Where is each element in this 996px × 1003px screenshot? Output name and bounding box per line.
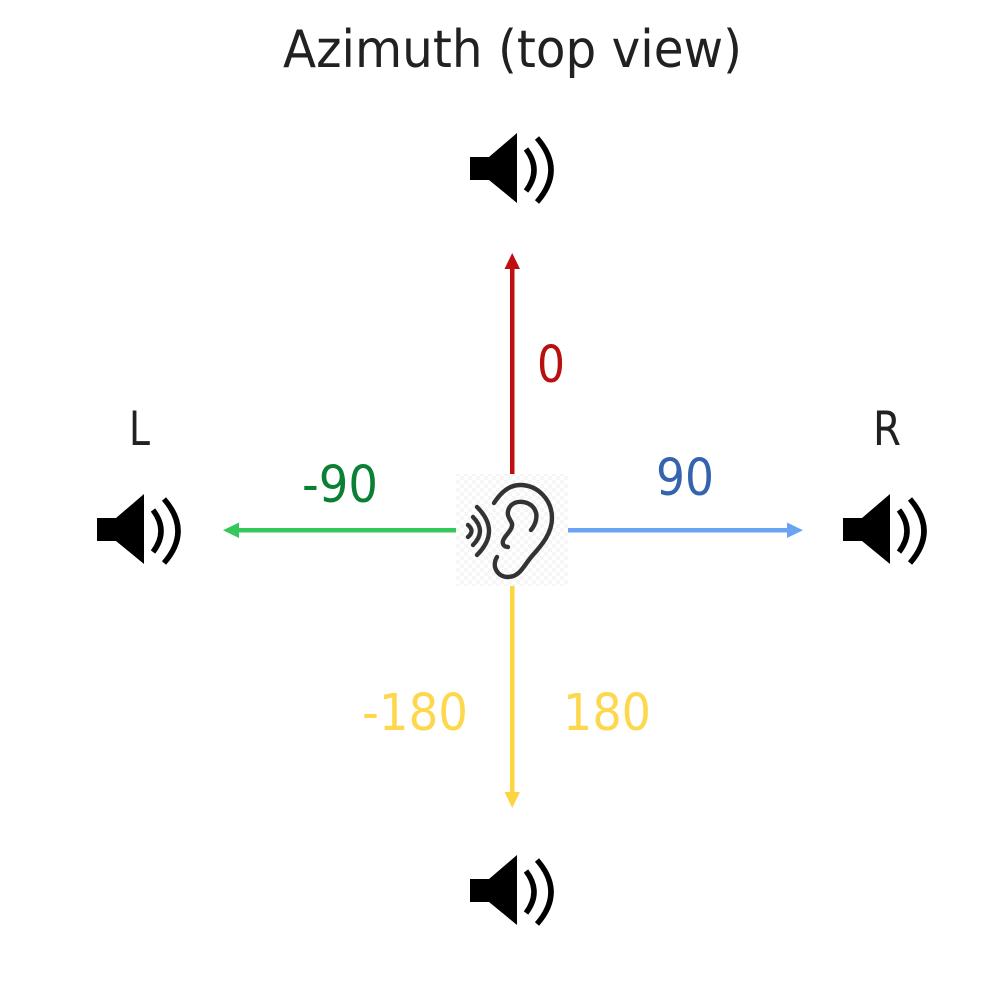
value: 0: 0 bbox=[537, 336, 565, 395]
title: Azimuth (top view) bbox=[283, 20, 742, 80]
arrow: left, green bbox=[223, 522, 456, 538]
value: 180: 180 bbox=[563, 684, 651, 743]
icon: ear with sound waves bbox=[456, 474, 568, 586]
speaker: back bbox=[470, 855, 551, 925]
value: -180: -180 bbox=[362, 684, 468, 743]
arrow: back, yellow bbox=[504, 586, 520, 808]
arrow: front, red bbox=[504, 253, 520, 474]
label: right channel: R bbox=[873, 402, 901, 457]
value: 90: 90 bbox=[656, 449, 714, 508]
speaker: left bbox=[97, 494, 178, 564]
speaker: right bbox=[843, 494, 924, 564]
arrow: right, blue bbox=[568, 522, 803, 538]
speaker: front bbox=[470, 133, 551, 203]
value: -90: -90 bbox=[302, 456, 378, 515]
label: left channel: L bbox=[129, 402, 150, 457]
